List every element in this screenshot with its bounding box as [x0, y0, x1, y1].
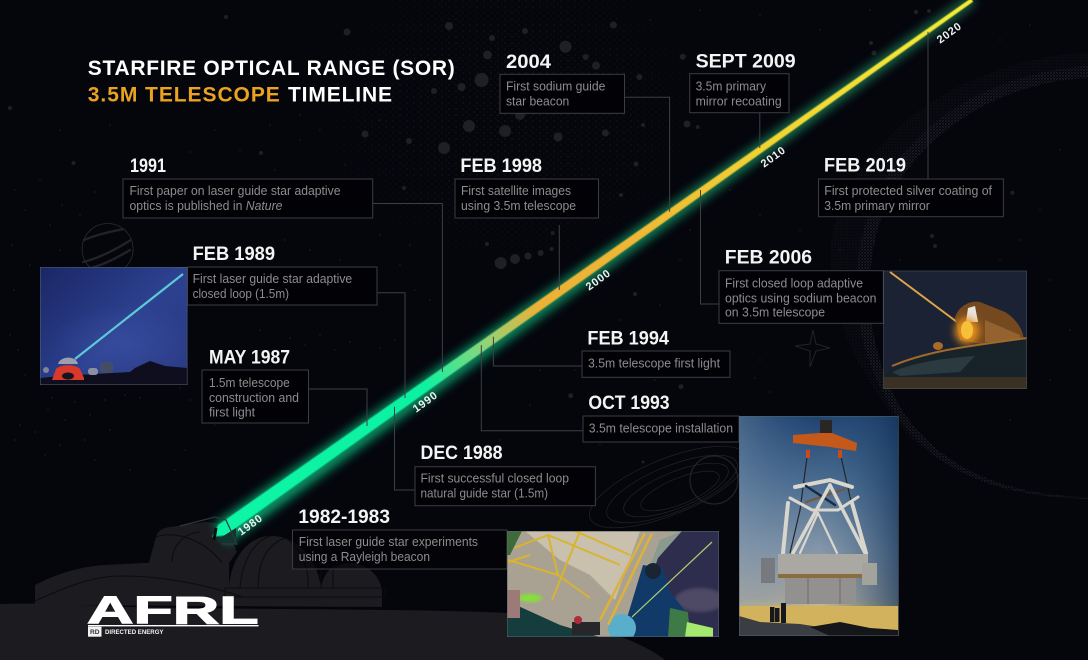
planet	[82, 224, 133, 274]
timeline beam	[180, 0, 976, 544]
event: 1982-1983	[292, 507, 507, 569]
event: Sept 2009	[690, 52, 796, 148]
event: Feb 1994: 3.5m telescope first light	[588, 356, 720, 371]
photo: Rayleigh beacon enclosure	[507, 531, 725, 642]
ground silhouette with observatory domes	[0, 522, 665, 660]
event: May 1987: first light	[209, 404, 255, 420]
event: Feb 1998: First satellite images	[461, 183, 571, 198]
event: Dec 1988: First successful closed loop	[420, 471, 569, 486]
ringed black hole	[580, 430, 756, 544]
event: 1991: 1991	[130, 156, 166, 177]
event: Feb 1989: closed loop (1.5m)	[193, 286, 289, 301]
event: Oct 1993: 3.5m telescope installation	[589, 420, 733, 435]
event: Dec 1988: natural guide star (1.5m)	[420, 486, 548, 501]
event: 1982-1983: 1982-1983	[298, 507, 390, 528]
event: Sept 2009: mirror recoating	[696, 93, 782, 108]
event: Sept 2009: SEPT 2009	[696, 52, 796, 73]
event: Feb 2006: FEB 2006	[725, 247, 812, 268]
event: Feb 1998	[455, 156, 598, 290]
event: 2004	[500, 52, 670, 212]
event: Feb 1989: First laser guide star adaptive	[193, 271, 352, 286]
event: 2004: First sodium guide	[506, 79, 605, 94]
title: 3.5M TELESCOPE	[88, 84, 280, 106]
event: 2004: star beacon	[506, 94, 569, 109]
event: Feb 2006: First closed loop adaptive	[725, 275, 863, 290]
event: Feb 2019: FEB 2019	[824, 156, 906, 177]
event: May 1987: construction and	[209, 390, 299, 405]
photo: sodium beacon telescope	[883, 271, 1027, 389]
title: TIMELINE	[288, 84, 392, 106]
event: Feb 1994: FEB 1994	[587, 328, 669, 349]
event: Feb 2019: First protected silver coating of	[824, 183, 992, 198]
telescope frame over beam start	[180, 517, 237, 544]
event: 1982-1983: First laser guide star experiments	[299, 534, 478, 549]
event: 2004: 2004	[506, 52, 551, 73]
event: 1991	[123, 156, 442, 372]
year markers on beam: 1990	[411, 390, 440, 415]
event: Feb 1998: FEB 1998	[460, 156, 542, 177]
year markers on beam: 2000	[584, 268, 613, 293]
event: May 1987: 1.5m telescope	[209, 375, 290, 390]
title: STARFIRE OPTICAL RANGE (SOR)	[88, 57, 455, 80]
event: Feb 2006: on 3.5m telescope	[725, 305, 825, 320]
background: deep space starfield	[8, 0, 1088, 528]
event: Feb 2019: 3.5m primary mirror	[824, 198, 930, 213]
year markers on beam: 2020	[935, 21, 964, 46]
year markers on beam: 1980	[236, 513, 265, 538]
event: Dec 1988: DEC 1988	[420, 443, 502, 464]
event: Dec 1988	[394, 407, 595, 506]
event: Feb 1998: using 3.5m telescope	[461, 198, 576, 213]
event: Feb 2019	[818, 32, 1003, 217]
event: Feb 1994	[493, 328, 730, 377]
event: 1991: First paper on laser guide star adaptive	[130, 183, 340, 198]
AFRL logo: DIRECTED ENERGY	[105, 629, 164, 636]
star outline	[795, 330, 830, 367]
event: Feb 2006	[700, 190, 883, 323]
AFRL logo	[87, 589, 258, 637]
photo: 3.5m telescope lift	[739, 416, 899, 636]
event: Feb 1989: FEB 1989	[193, 244, 275, 265]
event: Oct 1993	[481, 345, 739, 442]
event: May 1987: MAY 1987	[209, 348, 290, 368]
event: 1982-1983: using a Rayleigh beacon	[299, 549, 430, 564]
AFRL logo: AFRL	[87, 589, 258, 632]
event: May 1987	[202, 348, 367, 426]
year markers on beam: 2010	[759, 145, 788, 170]
AFRL logo: RD	[90, 629, 100, 636]
event: 1991: optics is published in Nature	[130, 198, 282, 213]
event: Feb 2006: optics using sodium beacon	[725, 290, 876, 305]
year markers on beam	[236, 21, 964, 538]
photo: 1.5m telescope green laser	[40, 267, 200, 385]
title	[88, 57, 455, 106]
event: Oct 1993: OCT 1993	[588, 393, 670, 414]
event: Sept 2009: 3.5m primary	[696, 78, 766, 93]
event: Feb 1989	[187, 244, 405, 398]
